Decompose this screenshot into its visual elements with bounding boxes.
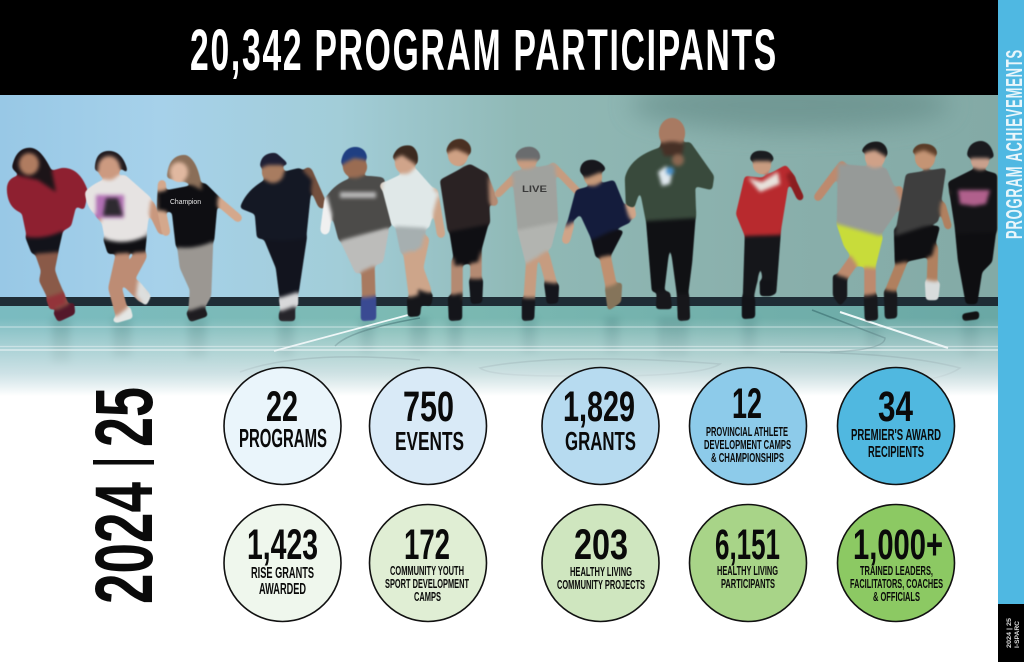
stat: 6,151 healthy living participants: PARTICIPANTS <box>721 577 775 591</box>
stat: 6,151 healthy living participants: 6,151 <box>715 521 780 569</box>
runner 13: dark T-shirt and black shorts <box>884 144 948 319</box>
runner 6: white T-shirt and grey shorts <box>381 146 441 317</box>
gym floor <box>0 306 998 396</box>
runner 12: grey T-shirt and neon shorts <box>818 142 902 321</box>
runner 1: red hoodie <box>7 148 88 322</box>
stat: 203 healthy living projects: 203 <box>574 521 628 569</box>
stat: 22 programs <box>224 368 341 484</box>
floor fade to white <box>0 318 998 396</box>
stat: 34 premier's award recipients: PREMIER'S AWARD <box>851 427 941 444</box>
year label: 2024 <box>79 482 170 604</box>
wall base strip <box>0 297 998 307</box>
stat: 1,829 grants <box>542 368 659 484</box>
stat: 172 community youth camps: COMMUNITY YOUTH <box>390 564 464 578</box>
side tab: program achievements <box>998 0 1024 604</box>
footer label <box>1006 618 1021 648</box>
stat: 1,423 rise grants: RISE GRANTS <box>251 565 314 582</box>
stat: 1,000+ trained leaders: TRAINED LEADERS, <box>860 564 933 578</box>
stat: 172 community youth camps: SPORT DEVELOPMENT <box>385 577 469 591</box>
stat: 1,423 rise grants <box>224 504 341 622</box>
stat: 12 provincial athlete camps: 12 <box>732 380 762 428</box>
stat: 1,829 grants: 1,829 <box>563 383 635 431</box>
stat: 22 programs: PROGRAMS <box>239 423 327 453</box>
runner 9: navy shirt and black cap <box>566 160 632 311</box>
footer label: I-SPARC <box>1014 621 1021 648</box>
runner 14: black outfit and cap <box>948 141 997 321</box>
stat: 750 events <box>370 368 486 484</box>
stat: 22 programs: 22 <box>266 383 298 431</box>
stat: 34 premier's award recipients: 34 <box>878 383 913 431</box>
shirt lettering: Champion: Champion <box>170 199 201 206</box>
stat: 172 community youth camps: 172 <box>404 521 450 569</box>
stat: 203 healthy living projects <box>542 504 659 622</box>
coach: green sweatshirt and black pants <box>625 118 714 321</box>
stat: 1,423 rise grants: AWARDED <box>259 581 306 598</box>
stat: 750 events: EVENTS <box>395 426 464 456</box>
stat: 6,151 healthy living participants <box>690 504 806 622</box>
footer tab <box>998 604 1024 662</box>
runner 11: red jersey and black cap <box>736 151 800 319</box>
stat: 172 community youth camps <box>370 504 486 622</box>
shirt lettering: LIVE: LIVE <box>522 184 547 194</box>
stat: 12 provincial athlete camps: & CHAMPIONSHIPS <box>711 451 784 465</box>
stat: 12 provincial athlete camps: PROVINCIAL ATHLETE <box>706 425 788 439</box>
runner 3: black Champion shirt <box>158 155 238 322</box>
stat: 1,000+ trained leaders <box>838 504 954 622</box>
stat: 172 community youth camps: CAMPS <box>414 590 441 604</box>
stat: 34 premier's award recipients: RECIPIENTS <box>868 444 924 461</box>
stat: 34 premier's award recipients <box>838 368 954 484</box>
stat: 203 healthy living projects: HEALTHY LIVING <box>570 565 632 579</box>
runner 2: white T-shirt <box>85 151 162 323</box>
stat: 203 healthy living projects: COMMUNITY PROJECTS <box>557 578 645 592</box>
gym wall <box>0 79 998 298</box>
runner 7: dark brown T-shirt <box>440 139 494 321</box>
title banner <box>0 0 998 95</box>
stat: 1,000+ trained leaders: 1,000+ <box>853 521 943 569</box>
stat: 750 events: 750 <box>403 383 454 431</box>
runner 4: black shirt and navy cap <box>240 153 322 321</box>
stat: 6,151 healthy living participants: HEALTHY LIVING <box>717 564 778 578</box>
stat: 1,000+ trained leaders: FACILITATORS, COACHES <box>850 577 943 591</box>
photo: children and coach sprinting in a gym <box>0 79 998 396</box>
stat: 1,829 grants: GRANTS <box>565 426 636 456</box>
stat: 12 provincial athlete camps: DEVELOPMENT CAMPS <box>704 438 791 452</box>
stat: 12 provincial athlete camps <box>690 368 806 484</box>
runner 8: grey T-shirt and grey cap <box>498 147 578 321</box>
stat: 1,000+ trained leaders: & OFFICIALS <box>873 590 920 604</box>
stat: 1,423 rise grants: 1,423 <box>247 521 318 569</box>
runner 5: grey shirt and blue cap <box>325 147 392 321</box>
footer label: 2024 | 25 <box>1006 618 1013 648</box>
year label: 25 <box>79 387 170 447</box>
